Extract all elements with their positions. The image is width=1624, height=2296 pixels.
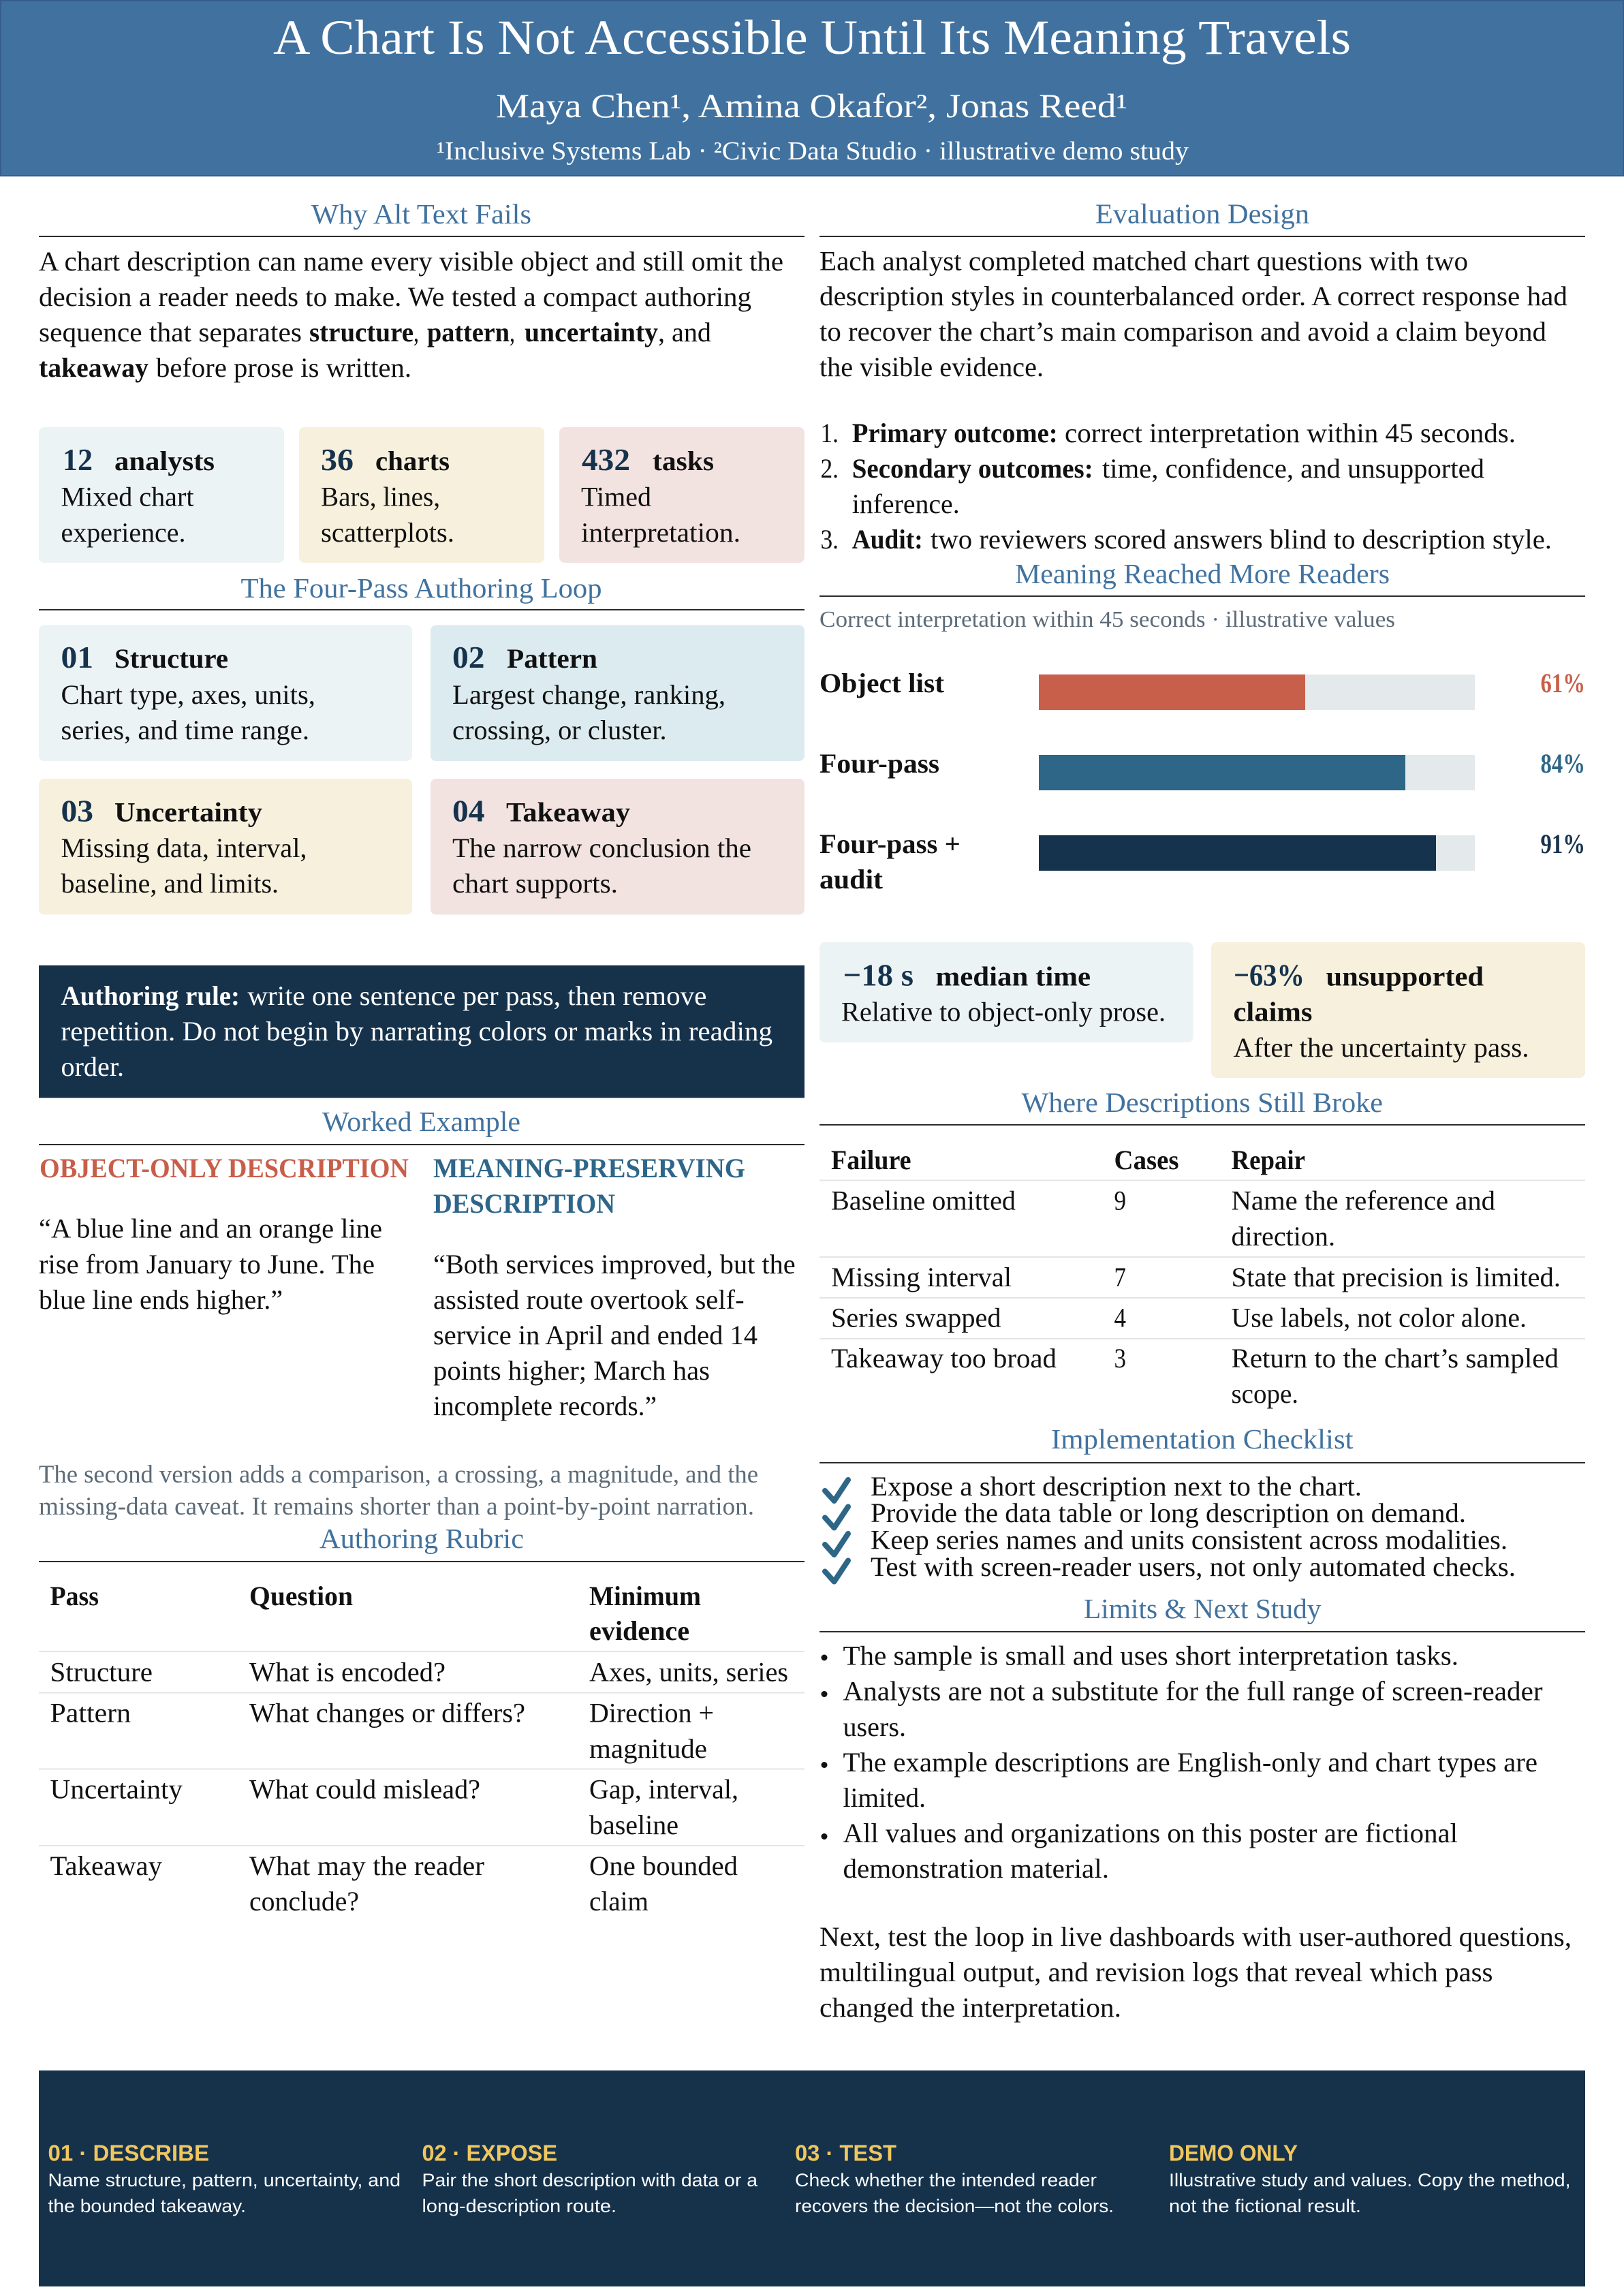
failure table: direction. — [1232, 1221, 1335, 1252]
stat card: analysts: 12 — [63, 442, 93, 477]
card: 04 takeaway: Takeaway — [506, 797, 630, 827]
card: 02 pattern: Largest change, ranking, — [452, 679, 725, 710]
footer: demo only: Illustrative study and values. Copy the method, — [1169, 2170, 1571, 2190]
numbered outcomes list: 2. — [820, 453, 839, 484]
heading: meaning reached: Meaning Reached More Readers — [1015, 558, 1390, 589]
example: meaning-preserving description: MEANING-PRESERVING — [433, 1153, 745, 1183]
intro paragraph — [39, 246, 783, 383]
heading: worked example: Worked Example — [322, 1106, 520, 1137]
affiliations: ¹Inclusive Systems Lab · ²Civic Data Studio · illustrative demo study — [437, 137, 1189, 166]
rubric table: conclude? — [249, 1886, 359, 1917]
footer: 03 test: Check whether the intended reader — [795, 2170, 1097, 2190]
footer: 02 expose: 02 · EXPOSE — [422, 2141, 557, 2165]
card: 03 uncertainty: Uncertainty — [114, 797, 262, 827]
heading: limits and next study: Limits & Next Study — [1084, 1593, 1322, 1624]
example: object-only description — [39, 1153, 409, 1315]
card: 04 takeaway: chart supports. — [452, 868, 618, 899]
rubric table: Gap, interval, — [589, 1774, 738, 1804]
result card: unsupported claims — [1211, 942, 1585, 1078]
rubric table: baseline — [589, 1810, 678, 1840]
intro paragraph: sequence that separates — [39, 317, 302, 347]
callout: authoring rule: order. — [61, 1051, 124, 1082]
result card: median time: −18 s — [843, 958, 914, 992]
bar: object list 61%: 61% — [1541, 668, 1585, 698]
intro paragraph: A chart description can name every visible object and still omit the — [39, 246, 783, 277]
numbered outcomes list: time, confidence, and unsupported — [1102, 453, 1484, 484]
stat card: analysts: Mixed chart — [61, 481, 193, 512]
card: 01 structure: 01 — [61, 640, 93, 674]
limits bullet list: limited. — [843, 1782, 926, 1813]
section: meaning reached more readers — [819, 558, 1585, 1078]
intro paragraph: , — [413, 317, 419, 347]
section: limits and next study — [819, 1593, 1585, 2023]
failure table — [819, 1145, 1585, 1409]
limits bullet list: The sample is small and uses short interpretation tasks. — [843, 1641, 1458, 1671]
card: 02 pattern: Pattern — [507, 643, 597, 674]
footer band — [39, 2070, 1585, 2286]
rubric table: Minimum — [589, 1581, 701, 1611]
footer: 01 describe: the bounded takeaway. — [48, 2196, 246, 2216]
failure table: scope. — [1232, 1378, 1298, 1409]
numbered outcomes list: Audit: — [852, 524, 923, 555]
limits bullet list — [822, 1641, 1542, 1884]
card: 04 takeaway: 04 — [452, 793, 485, 828]
checklist item 3: Keep series names and units consistent across modalities. — [871, 1525, 1508, 1555]
intro paragraph: uncertainty — [525, 317, 658, 347]
result card: unsupported claims: −63% — [1234, 958, 1305, 992]
bar: four-pass 84%: 84% — [1541, 748, 1585, 779]
card: 02 pattern — [431, 625, 805, 761]
section: worked example — [39, 1106, 805, 1521]
section: four-pass authoring loop — [39, 572, 805, 1098]
numbered outcomes list: two reviewers scored answers blind to description style. — [931, 524, 1552, 555]
authors: Maya Chen¹, Amina Okafor², Jonas Reed¹ — [496, 87, 1127, 125]
card: 02 pattern: crossing, or cluster. — [452, 715, 667, 745]
result card: median time: median time — [936, 961, 1091, 992]
footer: demo only: not the fictional result. — [1169, 2196, 1361, 2216]
rubric table: What is encoded? — [249, 1657, 446, 1687]
heading: implementation checklist: Implementation Checklist — [1051, 1423, 1354, 1455]
numbered outcomes list: 1. — [820, 418, 839, 448]
evaluation paragraph: Each analyst completed matched chart questions with two — [819, 245, 1468, 277]
bar: four-pass + audit 91% — [819, 828, 1585, 895]
rubric table: claim — [589, 1886, 649, 1917]
failure table: 4 — [1114, 1303, 1126, 1333]
evaluation paragraph: to recover the chart’s main comparison and avoid a claim beyond — [819, 316, 1546, 347]
example: meaning-preserving description: “Both services improved, but the — [433, 1249, 796, 1279]
footer: 03 test: recovers the decision—not the colors. — [795, 2196, 1114, 2216]
failure table: Cases — [1114, 1145, 1178, 1175]
failure table: Series swapped — [831, 1303, 1001, 1333]
intro paragraph: , — [510, 317, 515, 347]
example: object-only description: “A blue line and an orange line — [39, 1213, 382, 1244]
callout: authoring rule — [39, 965, 805, 1098]
rubric table: magnitude — [589, 1733, 707, 1764]
card: 01 structure: Structure — [114, 643, 228, 674]
limits bullet list: Analysts are not a substitute for the full range of screen-reader — [843, 1676, 1542, 1706]
stat card: tasks — [559, 427, 805, 563]
card: 03 uncertainty: baseline, and limits. — [61, 868, 279, 899]
card: 03 uncertainty: Missing data, interval, — [61, 833, 307, 863]
checklist item 1: Expose a short description next to the chart. — [871, 1471, 1362, 1502]
next study paragraph — [819, 1921, 1572, 2023]
failure table: Takeaway too broad — [831, 1343, 1057, 1374]
failure table: Baseline omitted — [831, 1185, 1016, 1215]
footer: 02 expose — [422, 2141, 758, 2216]
card: 01 structure: series, and time range. — [61, 715, 309, 745]
failure table: Name the reference and — [1232, 1185, 1495, 1215]
bar: four-pass + audit 91%: audit — [819, 864, 884, 895]
next study paragraph: multilingual output, and revision logs that reveal which pass — [819, 1957, 1493, 1987]
footer: demo only — [1169, 2141, 1571, 2216]
footer: 03 test — [795, 2141, 1114, 2216]
rubric table: Uncertainty — [50, 1774, 183, 1804]
icon: check mark — [825, 1534, 848, 1555]
card: 01 structure — [39, 625, 412, 761]
chart subtitle: Correct interpretation within 45 seconds · illustrative values — [819, 607, 1395, 632]
caption: comparison note — [39, 1461, 758, 1521]
footer: 02 expose: Pair the short description with data or a — [422, 2170, 758, 2190]
icon: check mark — [825, 1560, 848, 1582]
footer: 02 expose: long-description route. — [422, 2196, 616, 2216]
example: object-only description: rise from January to June. The — [39, 1249, 375, 1279]
example: object-only description: blue line ends higher.” — [39, 1284, 283, 1315]
section: why alt text fails — [39, 198, 805, 563]
rubric table: Structure — [50, 1657, 153, 1687]
result card: unsupported claims: unsupported — [1326, 961, 1484, 992]
footer: 01 describe — [48, 2141, 401, 2216]
numbered outcomes list: Secondary outcomes: — [852, 453, 1093, 484]
icon: check mark — [825, 1507, 848, 1527]
stat card: tasks: tasks — [653, 446, 714, 476]
intro paragraph: before prose is written. — [156, 352, 411, 383]
card: 03 uncertainty: 03 — [61, 793, 93, 828]
result card: unsupported claims: claims — [1233, 996, 1312, 1027]
rubric table: What could mislead? — [249, 1774, 480, 1804]
stat card: analysts: analysts — [114, 446, 215, 476]
bar chart — [819, 668, 1585, 895]
footer: demo only: DEMO ONLY — [1169, 2141, 1298, 2165]
footer: 03 test: 03 · TEST — [795, 2141, 896, 2165]
caption: comparison note: missing-data caveat. It remains shorter than a point-by-point narration. — [39, 1493, 754, 1521]
bar: four-pass 84% — [819, 748, 1585, 790]
checklist item 2: Provide the data table or long description on demand. — [871, 1498, 1466, 1528]
limits bullet list: demonstration material. — [843, 1853, 1109, 1884]
bar: four-pass + audit 91%: 91% — [1541, 828, 1585, 859]
footer: 01 describe: Name structure, pattern, uncertainty, and — [48, 2170, 401, 2190]
card: 04 takeaway — [431, 779, 805, 914]
section: where descriptions still broke — [819, 1087, 1585, 1409]
evaluation paragraph — [819, 245, 1567, 382]
rubric table: Axes, units, series — [589, 1657, 788, 1687]
numbered outcomes list: 3. — [820, 524, 839, 555]
stat card: charts — [299, 427, 544, 563]
stat card: tasks: Timed — [581, 481, 651, 512]
numbered outcomes list: inference. — [852, 488, 960, 519]
header banner — [1, 1, 1623, 176]
rubric table: Takeaway — [50, 1850, 162, 1881]
caption: comparison note: The second version adds a comparison, a crossing, a magnitude, and the — [39, 1461, 758, 1489]
limits bullet list: All values and organizations on this poster are fictional — [843, 1818, 1458, 1848]
icon: check mark — [825, 1480, 848, 1501]
example: meaning-preserving description: DESCRIPTION — [433, 1188, 615, 1219]
intro paragraph: decision a reader needs to make. We tested a compact authoring — [39, 281, 751, 312]
numbered outcomes list — [820, 418, 1552, 555]
stat card: charts: scatterplots. — [321, 517, 454, 548]
stat card: tasks: interpretation. — [581, 517, 740, 548]
numbered outcomes list: Primary outcome: — [852, 418, 1058, 448]
rubric table: evidence — [589, 1615, 689, 1646]
limits bullet list: users. — [843, 1711, 906, 1742]
bar: four-pass 84%: Four-pass — [819, 748, 939, 779]
example: meaning-preserving description: assisted route overtook self- — [433, 1284, 745, 1315]
limits bullet list: The example descriptions are English-only and chart types are — [843, 1747, 1537, 1778]
heading: why alt text fails: Why Alt Text Fails — [311, 198, 531, 230]
failure table: 7 — [1114, 1262, 1126, 1292]
failure table: Use labels, not color alone. — [1232, 1303, 1527, 1333]
footer: 01 describe: 01 · DESCRIBE — [48, 2141, 209, 2165]
stat card: analysts — [39, 427, 284, 563]
rubric table: What may the reader — [249, 1850, 484, 1881]
heading: evaluation design: Evaluation Design — [1095, 198, 1309, 229]
rubric table: Pattern — [50, 1698, 131, 1728]
heading: where descriptions broke: Where Descriptions Still Broke — [1022, 1087, 1383, 1118]
callout: authoring rule: write one sentence per pass, then remove — [247, 980, 706, 1011]
stat card: charts: Bars, lines, — [321, 481, 440, 512]
next study paragraph: Next, test the loop in live dashboards with user-authored questions, — [819, 1921, 1572, 1952]
stat card: charts: charts — [375, 446, 450, 476]
stat card: charts: 36 — [321, 442, 354, 477]
rubric table — [39, 1581, 805, 1917]
heading: authoring rubric: Authoring Rubric — [319, 1523, 524, 1554]
title: A Chart Is Not Accessible Until Its Meaning Travels — [273, 10, 1351, 65]
intro paragraph: , and — [658, 317, 711, 347]
result card: median time — [819, 942, 1193, 1042]
result card: unsupported claims: After the uncertainty pass. — [1233, 1032, 1529, 1063]
section: implementation checklist — [819, 1423, 1585, 1582]
example: meaning-preserving description: service in April and ended 14 — [433, 1320, 758, 1350]
rubric table: One bounded — [589, 1850, 738, 1881]
failure table: Repair — [1232, 1145, 1305, 1175]
intro paragraph: structure — [309, 317, 413, 347]
failure table: Failure — [831, 1145, 911, 1175]
rubric table: Pass — [50, 1581, 99, 1611]
failure table: 3 — [1114, 1343, 1126, 1374]
callout: authoring rule: repetition. Do not begin by narrating colors or marks in reading — [61, 1016, 772, 1046]
intro paragraph: pattern — [427, 317, 510, 347]
result card: median time: Relative to object-only prose. — [841, 996, 1166, 1027]
numbered outcomes list: correct interpretation within 45 seconds. — [1065, 418, 1516, 448]
bar: object list 61% — [819, 668, 1585, 710]
section: evaluation design — [819, 198, 1585, 555]
example: meaning-preserving description — [433, 1153, 796, 1421]
card: 03 uncertainty — [39, 779, 412, 914]
card: 01 structure: Chart type, axes, units, — [61, 679, 315, 710]
failure table: Return to the chart’s sampled — [1232, 1343, 1559, 1374]
next study paragraph: changed the interpretation. — [819, 1992, 1121, 2023]
checklist item 4: Test with screen-reader users, not only automated checks. — [871, 1551, 1516, 1582]
failure table: Missing interval — [831, 1262, 1012, 1292]
card: 04 takeaway: The narrow conclusion the — [452, 833, 751, 863]
stat card: tasks: 432 — [582, 442, 630, 477]
rubric table: Question — [249, 1581, 353, 1611]
example: meaning-preserving description: points higher; March has — [433, 1355, 710, 1386]
callout: authoring rule: Authoring rule: — [61, 980, 240, 1011]
failure table: State that precision is limited. — [1232, 1262, 1561, 1292]
rubric table: Direction + — [589, 1698, 714, 1728]
evaluation paragraph: the visible evidence. — [819, 352, 1044, 382]
card: 02 pattern: 02 — [452, 640, 485, 674]
failure table: 9 — [1114, 1185, 1126, 1215]
example: meaning-preserving description: incomplete records.” — [433, 1391, 657, 1421]
example: object-only description: OBJECT-ONLY DESCRIPTION — [40, 1153, 409, 1183]
bar: four-pass + audit 91%: Four-pass + — [819, 828, 961, 859]
evaluation paragraph: description styles in counterbalanced order. A correct response had — [819, 281, 1567, 311]
section: authoring rubric — [39, 1523, 805, 1917]
stat card: analysts: experience. — [61, 517, 185, 548]
intro paragraph: takeaway — [39, 352, 149, 383]
heading: four-pass loop: The Four-Pass Authoring Loop — [241, 572, 602, 604]
bar: object list 61%: Object list — [819, 668, 945, 698]
rubric table: What changes or differs? — [249, 1698, 525, 1728]
